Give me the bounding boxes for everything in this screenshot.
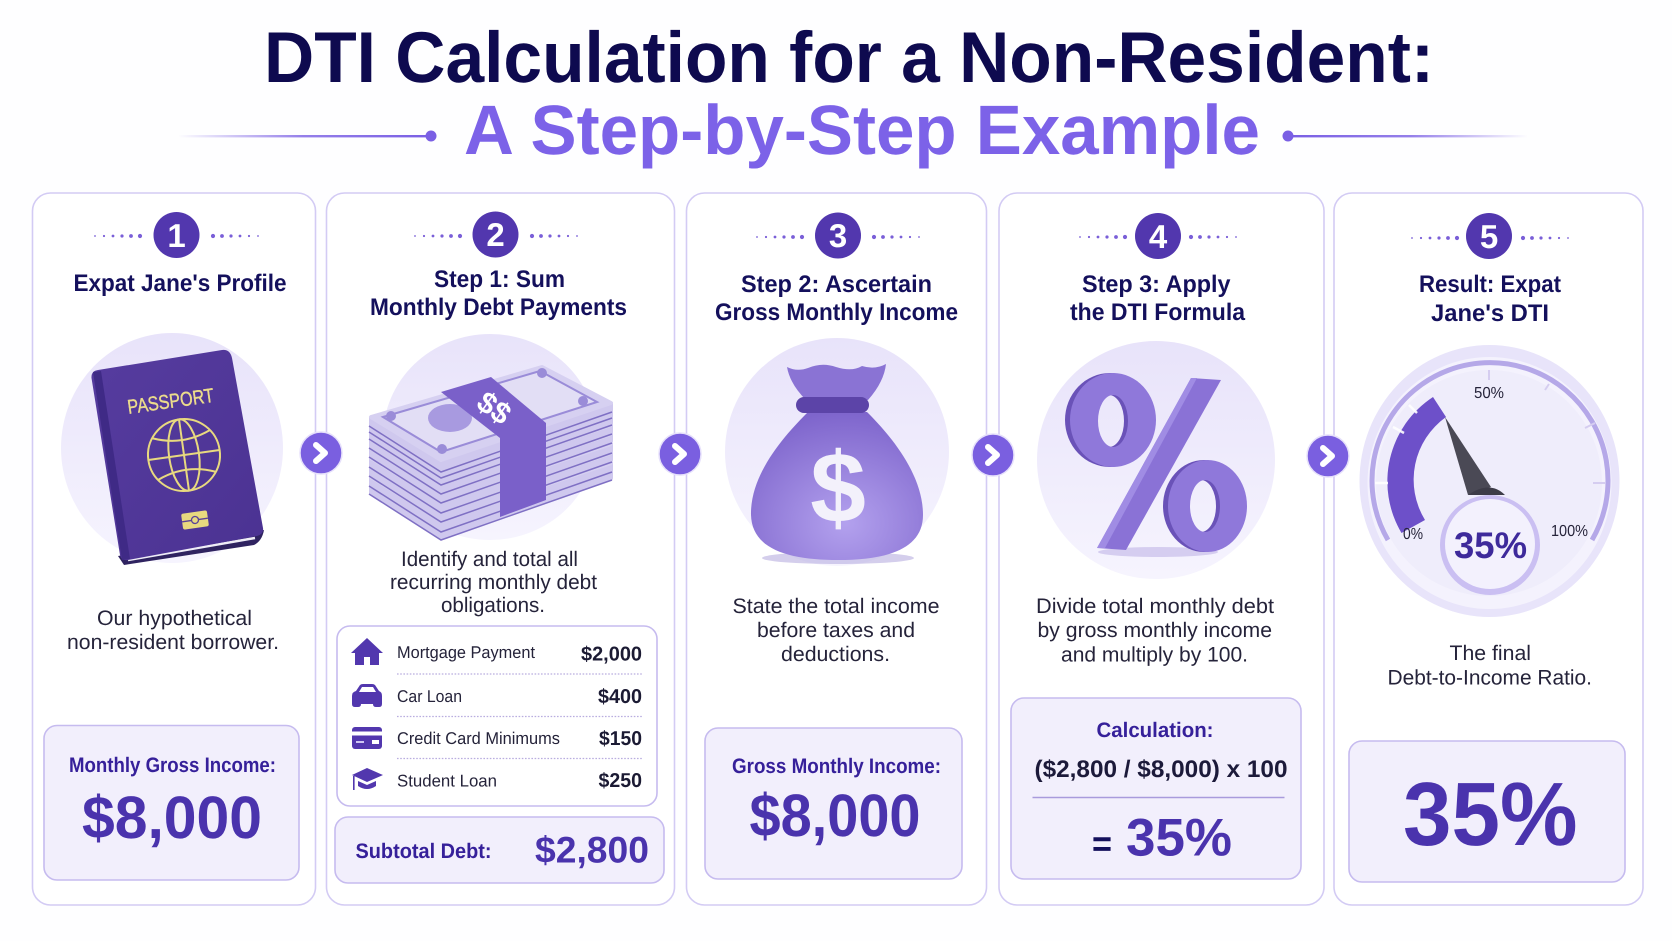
panel: expat profile <box>32 193 316 905</box>
icon: money bag: $ <box>810 432 866 544</box>
heading: Jane's DTI <box>1431 300 1549 327</box>
description: The final <box>1450 642 1531 665</box>
callout: calculation: ($2,800 / $8,000) x 100 <box>1034 756 1288 783</box>
row: car: $400 <box>598 686 642 708</box>
icon: stack of money: $$ <box>471 385 517 432</box>
row: credit card <box>352 727 642 750</box>
panel: result <box>1334 193 1643 905</box>
row: student loan <box>352 768 642 792</box>
gauge chart: 0% <box>1403 526 1423 543</box>
step badge 4: 4 <box>1149 218 1168 255</box>
needle <box>1445 417 1505 495</box>
description: before taxes and <box>757 619 915 642</box>
description: Identify and total all <box>401 548 578 571</box>
title <box>264 18 1434 169</box>
gauge chart: 100% <box>1551 523 1588 540</box>
title divider left <box>178 130 436 142</box>
callout: 35% result: 35% <box>1403 765 1578 865</box>
step badge 1: 1 <box>167 217 186 254</box>
step badge 1 <box>94 212 259 258</box>
step badge 3 <box>756 212 920 258</box>
callout: calculation: 35% <box>1126 808 1232 868</box>
step badge 2 <box>414 212 578 258</box>
icon: credit card <box>352 727 382 749</box>
description: Divide total monthly debt <box>1036 595 1274 618</box>
description <box>1388 642 1592 690</box>
callout: 35% result <box>1349 741 1625 882</box>
heading: Monthly Debt Payments <box>370 294 627 321</box>
description: Debt-to-Income Ratio. <box>1388 666 1592 690</box>
callout: monthly gross income: $8,000 <box>82 784 262 851</box>
panel: DTI formula <box>999 193 1324 905</box>
step badge 3: 3 <box>829 217 847 254</box>
step badge 5: 5 <box>1480 218 1498 255</box>
row: mortgage <box>351 638 642 666</box>
row: student loan: Student Loan <box>397 772 497 790</box>
icon: house <box>351 638 383 665</box>
heading: Step 2: Ascertain <box>741 271 932 298</box>
description: Our hypothetical <box>97 607 252 630</box>
arrow 3 <box>972 434 1014 476</box>
heading <box>715 271 958 326</box>
heading: Step 1: Sum <box>434 266 565 293</box>
step badge 5 <box>1411 213 1569 259</box>
heading: Expat Jane's Profile <box>74 270 286 297</box>
row: car: Car Loan <box>397 687 462 706</box>
heading <box>1070 271 1246 326</box>
icon: passport: PASSPORT <box>126 385 215 419</box>
title divider right <box>1282 130 1528 142</box>
callout: gross monthly income: $8,000 <box>750 782 920 849</box>
callout: subtotal debt: $2,800 <box>535 830 649 870</box>
gauge chart: 50% <box>1474 385 1504 402</box>
gauge hub <box>1440 495 1540 595</box>
description: deductions. <box>781 643 890 666</box>
icon: car <box>352 684 382 707</box>
heading <box>1419 271 1561 327</box>
arrow 4 <box>1307 435 1349 477</box>
heading: the DTI Formula <box>1070 299 1246 326</box>
row: car <box>352 684 642 708</box>
panel: sum debt payments <box>326 193 674 905</box>
callout: monthly gross income <box>44 726 299 880</box>
icon: stack of money <box>369 334 612 540</box>
step badge 4 <box>1079 213 1237 259</box>
row: mortgage: $2,000 <box>581 644 642 666</box>
row: credit card: $150 <box>599 728 642 750</box>
icon: money bag <box>725 338 949 566</box>
icon: graduation cap <box>352 768 383 790</box>
title: DTI Calculation for a Non-Resident: <box>264 18 1434 98</box>
description <box>67 607 279 654</box>
heading: Result: Expat <box>1419 271 1561 298</box>
heading: Gross Monthly Income <box>715 299 958 326</box>
arrow 1 <box>300 432 342 474</box>
row: student loan: $250 <box>598 770 642 792</box>
description: recurring monthly debt <box>390 571 597 594</box>
icon: passport <box>61 333 283 565</box>
gauge hub: 35% <box>1454 525 1527 566</box>
callout: calculation <box>1011 698 1301 879</box>
callout: gross monthly income <box>705 728 962 879</box>
callout: monthly gross income: Monthly Gross Income: <box>69 754 276 777</box>
gauge arc <box>1387 397 1446 533</box>
panel: gross monthly income <box>686 193 986 905</box>
arrow 2 <box>659 433 701 475</box>
callout: subtotal debt: Subtotal Debt: <box>356 840 492 863</box>
icon: percent sign <box>1037 341 1275 579</box>
description: State the total income <box>732 595 940 618</box>
step badge 2: 2 <box>486 216 505 253</box>
row: credit card: Credit Card Minimums <box>397 729 560 748</box>
title: A Step-by-Step Example <box>464 91 1260 169</box>
description: obligations. <box>441 594 545 617</box>
debt list <box>337 626 657 806</box>
description <box>390 548 597 617</box>
callout: gross monthly income: Gross Monthly Income: <box>732 755 941 778</box>
description: and multiply by 100. <box>1061 644 1248 666</box>
description: by gross monthly income <box>1038 619 1272 642</box>
heading: Step 3: Apply <box>1082 271 1231 298</box>
callout: calculation: = <box>1092 823 1112 864</box>
callout: calculation: Calculation: <box>1096 719 1214 742</box>
description: non-resident borrower. <box>67 631 279 654</box>
gauge chart <box>1360 345 1620 617</box>
description <box>1036 595 1274 666</box>
heading <box>370 266 627 321</box>
callout: subtotal debt <box>335 817 664 883</box>
description <box>732 595 940 666</box>
row: mortgage: Mortgage Payment <box>397 643 535 662</box>
